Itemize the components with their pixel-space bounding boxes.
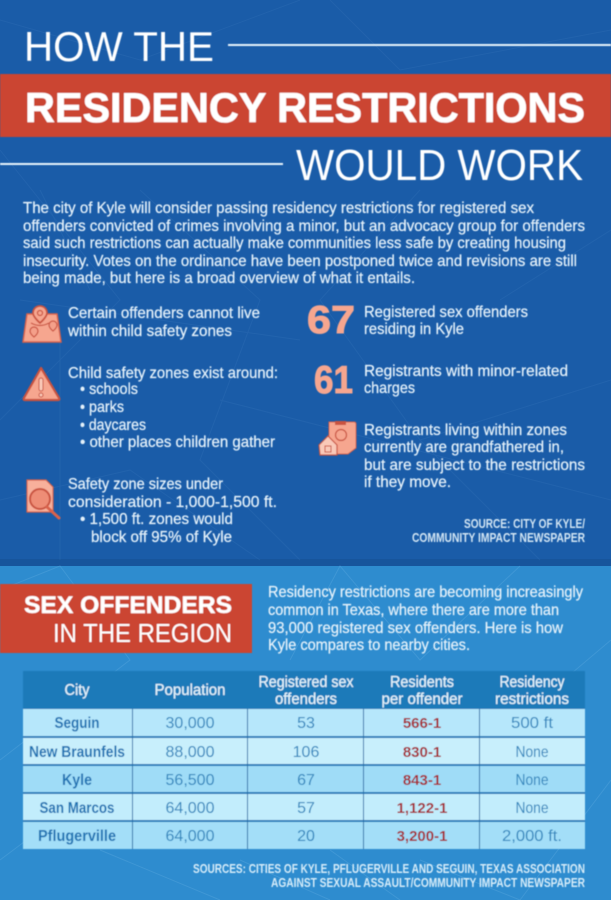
- section intro paragraph: [268, 584, 583, 654]
- row: Kyle: [62, 772, 549, 789]
- row: Seguin: 30,000: [166, 715, 215, 732]
- row: Kyle: Kyle: [62, 772, 92, 789]
- row: New Braunfels: New Braunfels: [29, 744, 125, 761]
- text: safety zone sizes: [68, 476, 277, 546]
- section heading: sex offenders in the region: IN THE REGION: [53, 618, 232, 648]
- icon: warning triangle: [24, 368, 59, 400]
- intro paragraph: being made, but here is a broad overview of what it entails.: [23, 270, 415, 287]
- source note: upper section: [412, 517, 585, 545]
- stat: 67 registered offenders: residing in Kyle: [364, 321, 464, 338]
- row: Seguin: [54, 715, 554, 732]
- row: Pflugerville: 3,200-1: [397, 828, 447, 845]
- text: offenders cannot live in zones: Certain offenders cannot live: [68, 305, 260, 322]
- text: safety zone sizes: block off 95% of Kyle: [91, 529, 232, 546]
- intro paragraph: offenders convicted of crimes involving a minor, but an advocacy group for offenders: [23, 218, 585, 235]
- row: Kyle: 56,500: [166, 772, 215, 789]
- text: child safety zone list: • parks: [80, 399, 124, 416]
- title line: WOULD WORK: WOULD WORK: [296, 141, 583, 190]
- title banner: RESIDENCY RESTRICTIONS: [0, 74, 611, 137]
- text: offenders cannot live in zones: within child safety zones: [67, 323, 232, 340]
- text: grandfathered registrants: currently are grandfathered in,: [364, 439, 564, 456]
- intro paragraph: The city of Kyle will consider passing residency restrictions for registered sex: [23, 200, 534, 217]
- row: Seguin: 500 ft: [511, 715, 554, 732]
- intro paragraph: insecurity. Votes on the ordinance have been postponed twice and revisions are still: [23, 253, 577, 270]
- row: Seguin: Seguin: [54, 715, 100, 732]
- section intro paragraph: Kyle compares to nearby cities.: [268, 637, 470, 654]
- section intro paragraph: common in Texas, where there are more than: [268, 602, 559, 619]
- stat: 61 registrants with minor-related charges: 61: [314, 359, 353, 402]
- text: child safety zone list: [68, 365, 278, 451]
- table header: Residents: [390, 674, 454, 691]
- text: child safety zone list: Child safety zones exist around:: [68, 365, 278, 382]
- title banner: RESIDENCY RESTRICTIONS: RESIDENCY RESTRICTIONS: [25, 84, 585, 131]
- text: safety zone sizes: Safety zone sizes under: [68, 476, 224, 493]
- stat: 67 registered offenders: Registered sex offenders: [364, 304, 528, 321]
- text: safety zone sizes: consideration - 1,000-1,500 ft.: [68, 494, 277, 511]
- table header: [64, 674, 569, 708]
- row: New Braunfels: 88,000: [166, 744, 215, 761]
- row: Seguin: 566-1: [403, 715, 441, 732]
- row: New Braunfels: 106: [293, 744, 319, 761]
- text: offenders cannot live in zones: [67, 305, 260, 340]
- text: grandfathered registrants: if they move.: [364, 474, 451, 491]
- section intro paragraph: Residency restrictions are becoming increasingly: [268, 584, 583, 601]
- row: San Marcos: 1,122-1: [397, 800, 447, 817]
- table header: Population: [154, 682, 226, 699]
- row: San Marcos: 64,000: [166, 800, 215, 817]
- text: child safety zone list: • schools: [80, 381, 138, 398]
- source note: table: [193, 862, 585, 890]
- text: child safety zone list: • other places children gather: [80, 434, 276, 451]
- row: Pflugerville: 2,000 ft.: [502, 828, 562, 845]
- row: New Braunfels: 830-1: [403, 744, 441, 761]
- stat: 67 registered offenders: [307, 299, 528, 342]
- stat: 61 registrants with minor-related charges: charges: [364, 380, 415, 397]
- table header: restrictions: [495, 691, 569, 708]
- table header: City: [64, 682, 90, 699]
- source note: upper section: SOURCE: CITY OF KYLE/: [464, 517, 585, 531]
- text: safety zone sizes: • 1,500 ft. zones would: [80, 511, 233, 528]
- row: San Marcos: San Marcos: [40, 800, 114, 817]
- intro paragraph: said such restrictions can actually make communities less safe by creating housing: [23, 235, 566, 252]
- title line: HOW THE: HOW THE: [24, 23, 214, 70]
- stat: 67 registered offenders: 67: [307, 299, 355, 342]
- intro paragraph: [23, 200, 585, 287]
- row: New Braunfels: None: [516, 744, 549, 761]
- row: Kyle: 67: [297, 772, 315, 789]
- row: San Marcos: None: [516, 800, 549, 817]
- icon: document with magnifier: [27, 480, 59, 518]
- table header: offenders: [275, 691, 337, 708]
- comparison table: [23, 671, 585, 849]
- row: San Marcos: [40, 800, 549, 817]
- table header: per offender: [382, 691, 462, 708]
- text: grandfathered registrants: Registrants living within zones: [364, 422, 567, 439]
- row: Kyle: 843-1: [403, 772, 441, 789]
- row: San Marcos: 57: [297, 800, 315, 817]
- row: Seguin: 53: [297, 715, 315, 732]
- icon: map with location pins: [23, 306, 61, 342]
- table header: Registered sex: [258, 674, 354, 691]
- row: New Braunfels: [29, 744, 549, 761]
- text: grandfathered registrants: [364, 422, 585, 491]
- icon: clipboard and house: [319, 421, 356, 455]
- stat: 61 registrants with minor-related charges: [314, 359, 568, 402]
- text: child safety zone list: • daycares: [80, 417, 146, 434]
- row: Pflugerville: 64,000: [166, 828, 215, 845]
- row: Pflugerville: Pflugerville: [38, 828, 116, 845]
- table header: Residency: [500, 674, 565, 691]
- row: Pflugerville: [38, 828, 562, 845]
- row: Pflugerville: 20: [297, 828, 315, 845]
- section heading: sex offenders in the region: [0, 584, 252, 653]
- section heading: sex offenders in the region: SEX OFFENDERS: [24, 592, 232, 619]
- section intro paragraph: 93,000 registered sex offenders. Here is how: [268, 620, 563, 637]
- text: grandfathered registrants: but are subject to the restrictions: [364, 457, 585, 474]
- row: Kyle: None: [516, 772, 549, 789]
- stat: 61 registrants with minor-related charges: Registrants with minor-related: [364, 363, 568, 380]
